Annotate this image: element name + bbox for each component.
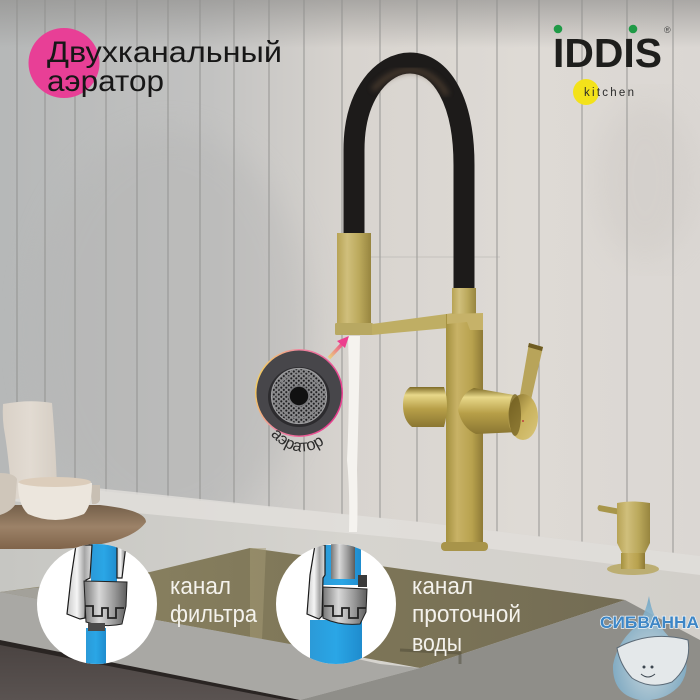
end cap — [508, 394, 538, 440]
aerator core — [323, 587, 367, 624]
countertop — [0, 478, 700, 700]
main body — [446, 314, 483, 544]
arrow — [329, 336, 349, 358]
blue filter channel — [91, 544, 117, 582]
water drop — [613, 596, 687, 700]
kitchen label: kitchen — [584, 87, 634, 99]
neck — [452, 288, 476, 316]
filter channel label: фильтра — [170, 601, 258, 628]
crockery on wooden tray — [0, 401, 146, 549]
filter channel label: канал — [170, 573, 231, 600]
filter channel circle — [37, 540, 157, 668]
sprayer collar — [335, 323, 373, 335]
flow channel label: канал — [412, 573, 473, 600]
bowl inside — [19, 477, 91, 487]
aerator callout — [255, 336, 349, 452]
small cup — [90, 485, 100, 504]
flow channel circle — [276, 543, 396, 670]
heading line 1: Двухканальный — [47, 36, 282, 69]
pitcher — [3, 401, 57, 500]
flow channel label: воды — [412, 630, 462, 657]
title with pink blob — [28, 28, 282, 98]
registered mark: ® — [664, 25, 671, 35]
base ring — [441, 542, 488, 551]
black flexible hose — [354, 63, 464, 290]
tub face — [642, 666, 654, 668]
hose highlight — [373, 70, 447, 95]
flow channel label: проточной — [412, 601, 521, 628]
lever handle — [520, 343, 543, 400]
pink blob — [28, 28, 100, 98]
right side arm — [458, 388, 520, 434]
wooden tray — [0, 505, 146, 549]
green dots — [554, 25, 637, 33]
background: tiled wall — [0, 0, 700, 560]
bathtub — [617, 636, 689, 685]
aerator core — [84, 581, 127, 626]
sprayer head — [337, 233, 371, 323]
pump spout — [598, 505, 626, 516]
front bowl — [18, 478, 92, 520]
teeth — [324, 606, 366, 618]
outlet pipe — [86, 628, 106, 668]
right sleeve — [117, 545, 126, 578]
aerator label: аэратор — [272, 430, 323, 452]
faucet — [335, 63, 543, 551]
left bowl — [0, 473, 17, 515]
watermark: Sibvanna — [600, 596, 699, 700]
soap dispenser — [598, 502, 659, 575]
dispenser neck — [621, 553, 645, 569]
central chrome tube — [331, 543, 355, 579]
dispenser base — [607, 563, 659, 575]
teeth — [85, 606, 124, 618]
sink basin — [0, 548, 700, 700]
watermark word: СИБВАННА — [600, 613, 699, 632]
right thread — [358, 575, 367, 587]
yellow dot — [573, 79, 599, 105]
mesh — [272, 368, 326, 424]
heading line 2: аэратор — [47, 65, 164, 98]
gradient ring — [255, 349, 343, 437]
water stream — [347, 336, 360, 532]
dispenser body — [617, 502, 650, 553]
left side arm — [403, 387, 447, 427]
body top lip — [447, 313, 483, 330]
wordmark: IDDIS — [553, 30, 662, 76]
neck — [88, 623, 105, 631]
outer sleeve — [307, 545, 325, 619]
outer sleeve — [67, 545, 92, 619]
aerator disc — [256, 350, 342, 436]
centre hole — [289, 386, 309, 406]
upper channels — [323, 545, 361, 585]
IDDIS kitchen logo — [553, 25, 671, 105]
blue flow channel — [310, 620, 362, 664]
arm — [372, 313, 470, 335]
